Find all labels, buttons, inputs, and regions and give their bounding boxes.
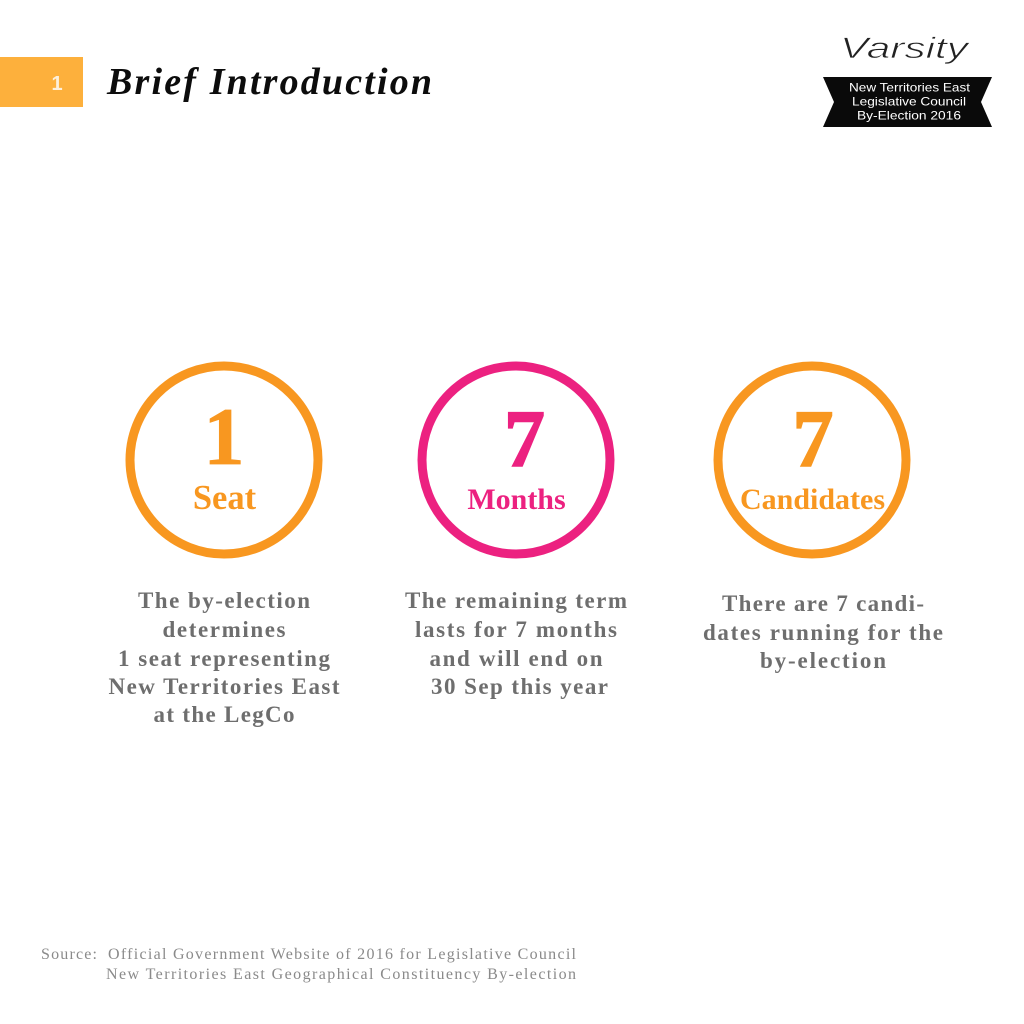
text block: months description bbox=[405, 588, 627, 699]
stat circle: 1 seat: 1 bbox=[204, 391, 244, 482]
text block: months description: The remaining term bbox=[405, 588, 627, 613]
stat circle: 7 candidates bbox=[718, 366, 906, 554]
text block: seat description: The by-election bbox=[138, 588, 310, 613]
text block: seat description bbox=[108, 588, 340, 727]
source note: Official Government Website of 2016 for Legislative Council bbox=[108, 946, 577, 963]
ribbon banner: Legislative Council bbox=[852, 94, 966, 108]
stat circle: 1 seat: Seat bbox=[193, 479, 257, 517]
text block: months description: 30 Sep this year bbox=[431, 674, 608, 699]
source note bbox=[41, 946, 577, 983]
stat circle: 7 candidates: 7 bbox=[792, 393, 834, 484]
ribbon banner: By-Election 2016 bbox=[857, 108, 961, 122]
text block: seat description: at the LegCo bbox=[154, 702, 294, 727]
stat circle: 7 candidates: Candidates bbox=[740, 483, 885, 516]
section number tab: 1 bbox=[51, 73, 63, 95]
text block: months description: and will end on bbox=[430, 646, 603, 671]
logo: Varsity: Varsity bbox=[840, 32, 971, 65]
text block: candidates description: There are 7 candi- bbox=[722, 591, 924, 616]
stat circle: 7 months bbox=[422, 366, 610, 554]
stat circle: 7 months: Months bbox=[467, 483, 566, 516]
text block: months description: lasts for 7 months bbox=[415, 617, 617, 642]
stat circle: 1 seat bbox=[130, 366, 318, 554]
text block: candidates description: by-election bbox=[760, 648, 886, 673]
section number tab bbox=[0, 57, 83, 107]
source note: Source: bbox=[41, 946, 97, 963]
title: Brief Introduction bbox=[106, 61, 432, 103]
text block: candidates description bbox=[703, 591, 943, 673]
ribbon banner bbox=[823, 77, 992, 127]
ribbon banner: New Territories East bbox=[849, 80, 971, 94]
text block: seat description: 1 seat representing bbox=[118, 646, 330, 671]
stat circle: 7 months: 7 bbox=[504, 393, 545, 484]
source note: New Territories East Geographical Constituency By-election bbox=[106, 966, 576, 983]
text block: seat description: determines bbox=[162, 617, 286, 642]
text block: seat description: New Territories East bbox=[108, 674, 340, 699]
text block: candidates description: dates running for the bbox=[703, 620, 943, 645]
